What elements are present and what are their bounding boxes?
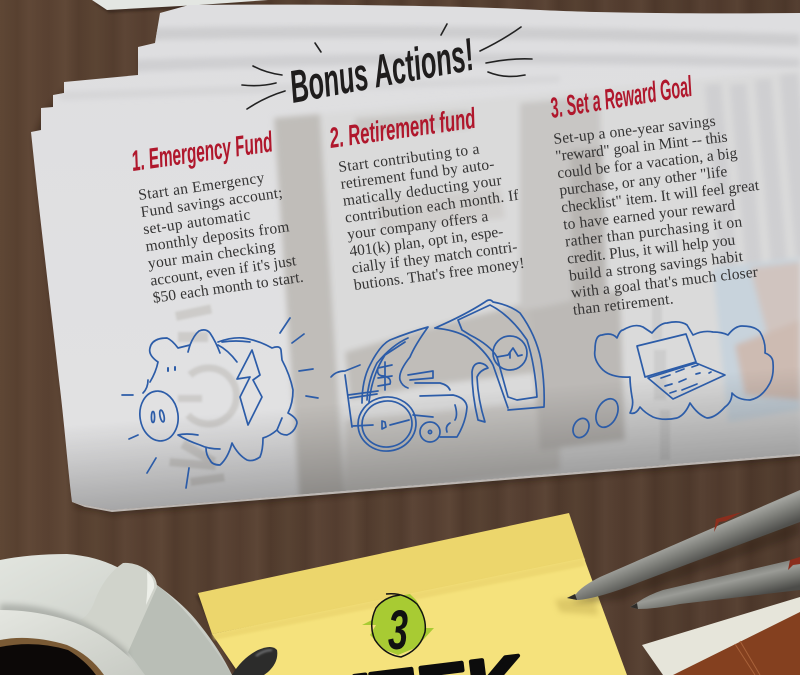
body text 2 [337, 136, 529, 294]
body text 2: your company offers a [346, 208, 489, 243]
white paper scrap at top [92, 0, 274, 13]
body text 2: matically deducting your [342, 172, 503, 210]
body text 1 [137, 166, 305, 307]
body text 2: retirement fund by auto- [340, 156, 495, 193]
newspaper stack [0, 0, 800, 520]
icon: walking cane sketch [472, 363, 488, 422]
pen 1 [567, 490, 800, 603]
body text 3 [553, 108, 772, 319]
cup rim [0, 610, 143, 675]
cup handle [80, 563, 157, 652]
color newspaper photo [713, 258, 800, 422]
column 2: Retirement fund [327, 103, 529, 294]
title: Bonus Actions!: Bonus Actions! [285, 28, 478, 113]
body text 3: purchase, or any other "life [558, 163, 728, 199]
body text 1: your main checking [147, 238, 276, 272]
newspaper photo, grey columns [274, 70, 800, 505]
green scribble [362, 594, 434, 655]
body text 1: account, even if it's just [149, 252, 298, 290]
icon: wheelchair sketch [331, 327, 467, 455]
coffee cup and saucer [0, 554, 232, 675]
title burst lines [242, 24, 532, 109]
icon: thought cloud with laptop [570, 322, 773, 440]
body text 1: monthly deposits from [144, 218, 290, 255]
body text 2: contribution each month. If [344, 187, 521, 227]
number 3 badge [362, 594, 434, 661]
pen 2 [630, 557, 800, 609]
column 1: Emergency Fund [130, 126, 305, 307]
body text 3: checklist" item. It will feel great [560, 177, 761, 216]
icon: dollar bill arch sketch [435, 300, 544, 410]
coffee crema ring [0, 638, 104, 675]
body text 1: Fund savings account; [140, 184, 284, 221]
white paper and leather notebook corner [642, 597, 800, 675]
body text 3: "reward" goal in Mint -- this [554, 129, 728, 165]
spoon [232, 647, 277, 675]
body text 3: than retirement. [572, 291, 674, 319]
body text 3: build a strong savings habit [568, 248, 745, 285]
body text 1: $50 each month to start. [152, 269, 305, 307]
body text 3: rather than purchasing it on [564, 213, 743, 251]
body text 1: set-up automatic [142, 206, 251, 238]
saucer [0, 554, 232, 675]
newspaper column text stripes [705, 73, 800, 274]
column 3: Set a Reward Goal [548, 71, 772, 319]
icon: piggy bank sketch [122, 318, 318, 488]
hand-drawn circle [372, 594, 425, 657]
body text 3: with a goal that's much closer [570, 264, 760, 302]
body text 2: Start contributing to a [337, 141, 480, 176]
body text 3: to have earned your reward [562, 197, 736, 233]
body text 3: could be for a vacation, a big [556, 145, 738, 182]
body text 2: 401(k) plan, opt in, espe- [348, 223, 504, 260]
heading 2: 2. Retirement fund [327, 103, 478, 155]
leather notebook [673, 612, 800, 675]
numeral: 3 [388, 598, 408, 661]
sticky note [196, 513, 627, 675]
body text 2: cially if they match contri- [351, 238, 518, 277]
body text 1: Start an Emergency [137, 169, 266, 204]
body text 3: credit. Plus, it will help you [566, 232, 736, 268]
heading 1: 1. Emergency Fund [130, 126, 275, 178]
body text 3: Set-up a one-year savings [553, 113, 716, 148]
faded blackletter masthead [169, 300, 670, 486]
coffee [0, 644, 96, 675]
body text 2: butions. That's free money! [353, 255, 526, 294]
